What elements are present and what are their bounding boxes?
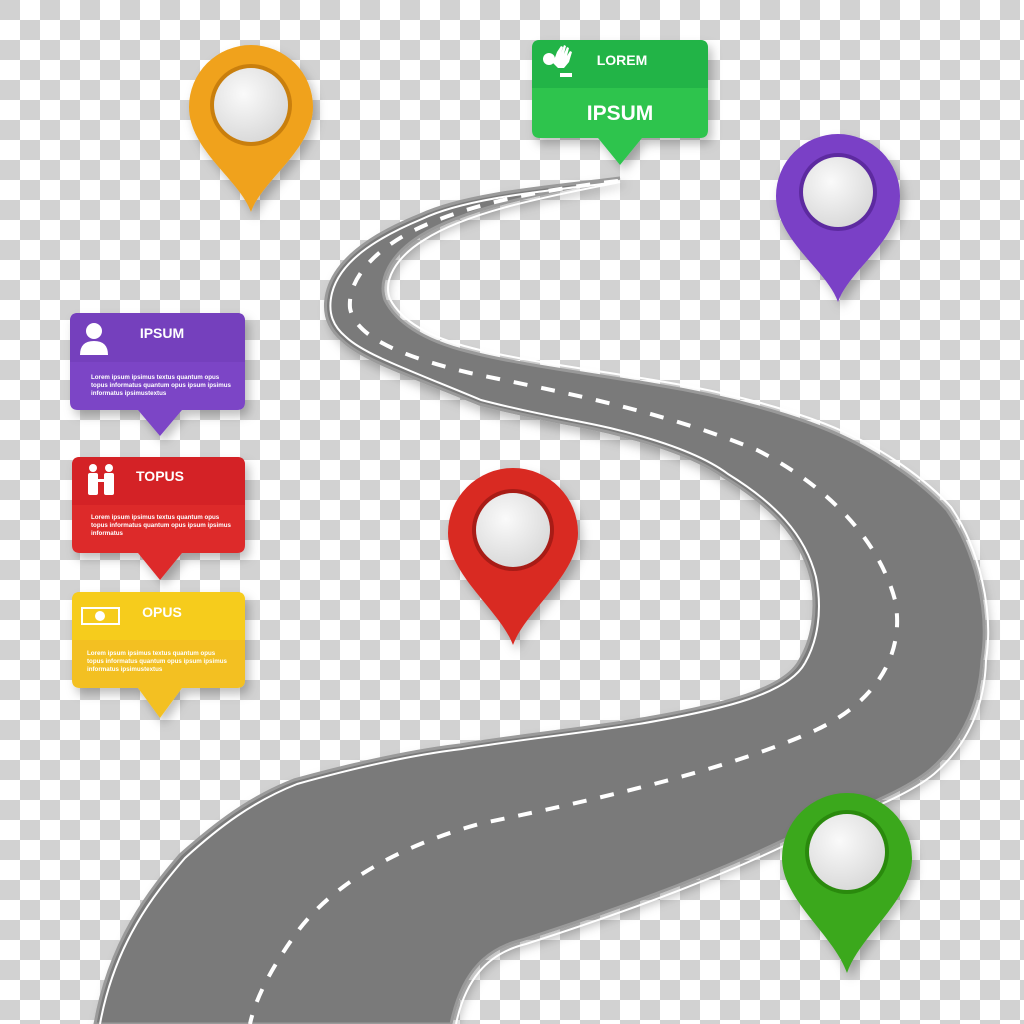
text block: informatus (91, 530, 124, 537)
text block (91, 514, 231, 537)
road center dashes (250, 181, 897, 1024)
icon: person (80, 323, 108, 355)
callout: yellow OPUS (72, 592, 245, 718)
icon: handshake (88, 464, 114, 495)
callout: yellow OPUS: OPUS (142, 604, 182, 620)
pin: green (782, 793, 912, 973)
callout: green LOREM IPSUM: LOREM (597, 52, 647, 68)
callout: purple IPSUM: IPSUM (140, 325, 184, 341)
text block: topus informatus quantum opus ipsum ipsimus (87, 658, 227, 665)
text block: Lorem ipsum ipsimus textus quantum opus (87, 650, 216, 657)
pin: red (448, 468, 578, 645)
pin: orange (189, 45, 313, 212)
text block: topus informatus quantum opus ipsum ipsimus (91, 522, 231, 529)
text block: informatus ipsimustextus (87, 666, 163, 673)
text block: informatus ipsimustextus (91, 390, 167, 397)
callout: purple IPSUM (70, 313, 245, 436)
road edge lines (100, 182, 988, 1024)
text block: topus informatus quantum opus ipsum ipsimus (91, 382, 231, 389)
callout: green LOREM IPSUM: IPSUM (587, 102, 653, 125)
text block (91, 374, 231, 397)
text block: Lorem ipsum ipsimus textus quantum opus (91, 374, 220, 381)
pin: purple (776, 134, 900, 302)
text block (87, 650, 227, 673)
callout: red TOPUS: TOPUS (136, 468, 184, 484)
callout: green LOREM IPSUM (532, 40, 708, 165)
callout: red TOPUS (72, 457, 245, 580)
road (95, 178, 984, 1024)
text block: Lorem ipsum ipsimus textus quantum opus (91, 514, 220, 521)
icon: hand with coin (543, 45, 572, 77)
icon: banknote (82, 608, 119, 624)
